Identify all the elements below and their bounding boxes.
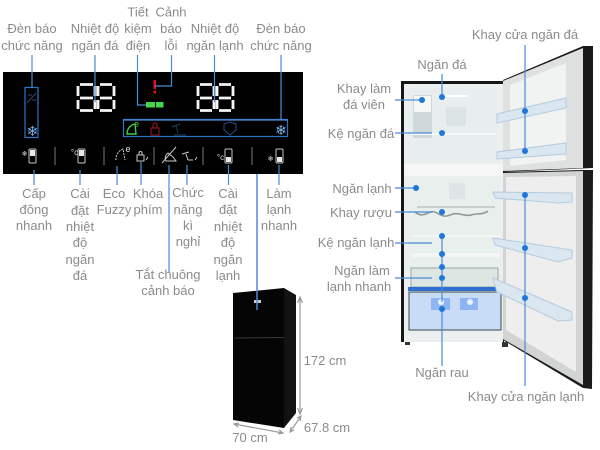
labels below panel: lạnh [267,202,291,217]
labels below panel: Làm [266,186,292,201]
labels above panel: chức năng [1,38,63,53]
labels: fridge: đá viên [343,97,385,112]
labels below panel: độ [221,235,235,250]
labels below panel: ngăn [66,252,94,267]
upper door [503,46,593,172]
left digit display: freezer temperature [78,84,114,110]
labels: fridge: Kệ ngăn lạnh [318,235,394,250]
labels: fridge: Khay rượu [330,205,392,220]
small fridge with dimensions: 70 cm [232,430,268,445]
lower door [503,170,593,389]
labels: fridge: Kệ ngăn đá [328,126,395,141]
leader lines and dots: fridge [395,45,528,386]
open refrigerator [401,46,593,389]
crisper drawer [408,287,502,291]
button icons: ❄ [22,150,28,158]
labels above panel: điện [126,38,150,53]
labels: fridge: Ngăn rau [415,365,469,380]
door shelves [493,98,572,321]
labels below panel: Fuzzy [97,202,132,217]
leader lines: control panel [32,55,288,310]
red error icon [154,80,156,94]
labels: fridge [318,27,584,404]
cabinet [401,81,504,342]
labels below panel: ngăn [214,252,242,267]
labels below panel: lạnh [216,268,240,283]
labels: fridge: Khay làm [337,81,391,96]
right digit display: fridge temperature [198,84,233,110]
button icons: ❄ [268,155,274,163]
labels above panel: Nhiệt độ [191,21,239,36]
fridge interior details [449,183,465,199]
labels: fridge: Ngăn đá [417,57,467,72]
left function indicator box [25,88,38,139]
button icons: °c [217,153,224,162]
labels below panel [16,185,297,298]
labels below panel: nhiệt [214,219,242,234]
labels above panel: chức năng [250,38,312,53]
labels below panel: kì [183,218,193,233]
labels below panel: nhiệt [66,219,94,234]
labels: fridge: Khay cửa ngăn lạnh [468,389,584,404]
bottom function indicator box [124,119,288,138]
labels below panel: Chức [172,185,204,200]
labels below panel: Eco [103,186,125,201]
labels above panel [1,4,312,53]
left function indicator box: ❄ [27,123,38,139]
labels below panel: Tắt chuông [135,267,201,282]
labels above panel: lỗi [164,38,178,53]
labels below panel: phím [134,202,162,217]
dividers [55,147,252,165]
labels below panel: đặt [71,203,89,218]
green eco bar [146,102,164,108]
labels below panel: nghỉ [176,234,200,249]
control panel [3,72,303,174]
labels below panel: đá [73,268,88,283]
labels: fridge: Ngăn lạnh [332,181,392,196]
bottom function indicator box: ❄ [275,122,287,138]
button icons: °c [71,148,78,157]
labels above panel: ngăn đá [72,38,119,53]
labels above panel: Tiết [127,4,149,20]
labels: fridge: Khay cửa ngăn đá [472,27,579,42]
labels below panel: nhanh [261,218,297,233]
labels above panel: Nhiệt độ [71,21,119,36]
small fridge with dimensions [232,288,350,445]
labels: fridge: lạnh nhanh [327,279,391,294]
labels below panel: đông [20,202,48,217]
button icons [22,144,283,163]
labels below panel: đặt [219,202,237,217]
labels below panel: cảnh báo [141,283,195,298]
bottom function indicator box: e [134,119,139,129]
labels above panel: Cảnh [155,4,187,20]
labels below panel: Khóa [133,186,164,201]
labels below panel: năng [174,202,202,217]
labels above panel: ngăn lạnh [186,38,244,53]
labels above panel: Đèn báo [256,21,306,36]
labels: fridge: Ngăn làm [334,263,390,278]
feet [405,342,410,345]
small fridge with dimensions: 67.8 cm [304,420,350,435]
labels above panel: báo [160,21,182,36]
freezer interior details [413,95,432,138]
labels below panel: độ [73,235,87,250]
labels above panel: Đèn báo [7,21,57,36]
labels below panel: Cài [218,186,238,201]
labels below panel: Cấp [22,186,46,201]
button icons: e [125,144,131,154]
labels below panel: Cài [70,186,90,201]
labels below panel: nhanh [16,218,52,233]
small fridge with dimensions: 172 cm [304,353,346,368]
labels above panel: kiệm [124,21,152,36]
